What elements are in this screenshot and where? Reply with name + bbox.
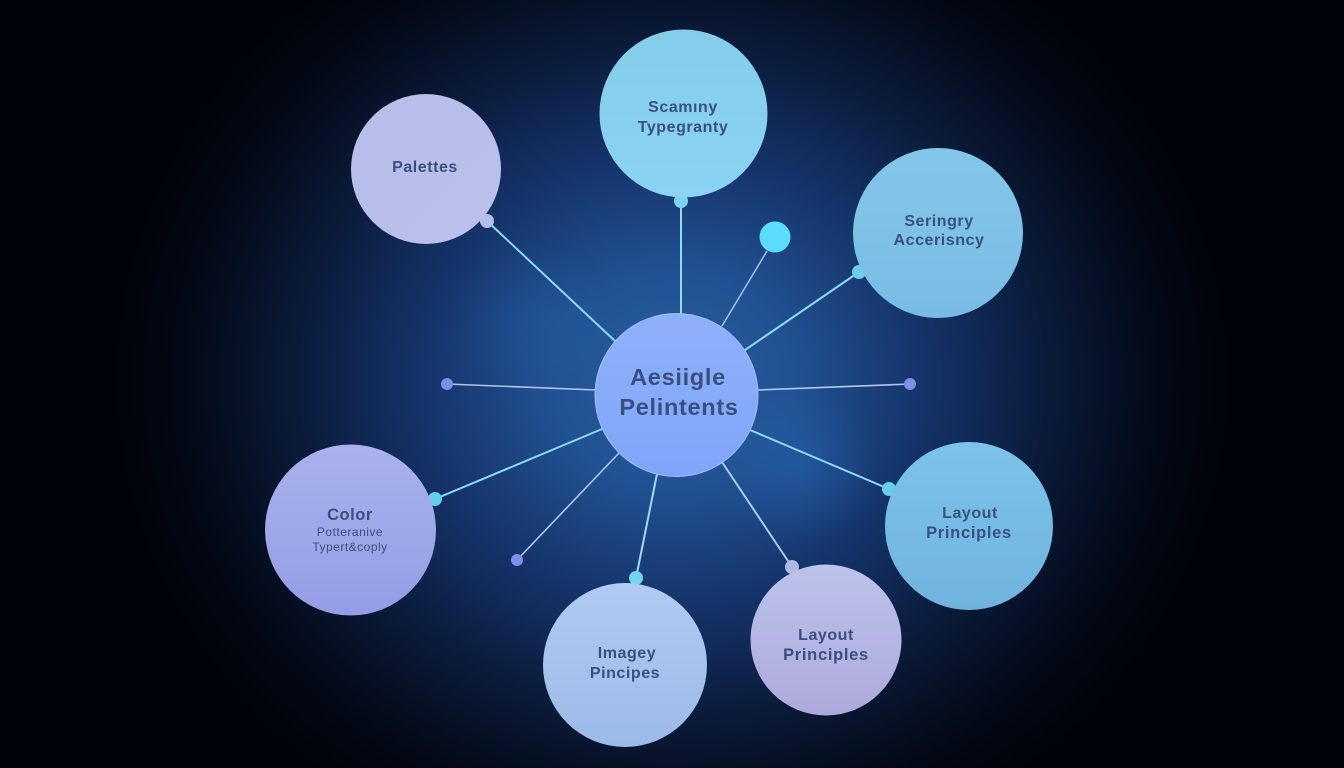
node: layout right: Principles xyxy=(926,524,1012,542)
central node: Aesiigle xyxy=(630,364,726,390)
connector: palettes xyxy=(480,214,615,341)
central node xyxy=(595,314,758,476)
node: color xyxy=(265,444,436,616)
connector: accuracy xyxy=(745,265,866,350)
connector: floating cyan node xyxy=(722,222,790,326)
node: layout lower: Layout xyxy=(798,627,854,644)
connector: typography xyxy=(674,194,688,314)
node: imagery xyxy=(543,583,707,747)
connector: imagery xyxy=(629,474,657,585)
node: color: Color xyxy=(327,506,373,524)
node: accuracy: Accerisncy xyxy=(894,232,984,249)
connector: left node xyxy=(441,378,596,390)
node: color: Potteranive xyxy=(317,525,383,539)
node: imagery: Imagey xyxy=(598,645,656,662)
node: layout lower xyxy=(750,564,902,716)
node: palettes xyxy=(351,94,501,244)
central node: Pelintents xyxy=(619,394,739,420)
node: imagery: Pincipes xyxy=(590,665,660,682)
node: palettes: Palettes xyxy=(392,159,458,176)
node: typography xyxy=(600,30,768,198)
node: layout lower: Principles xyxy=(783,646,869,664)
connector: lower left node xyxy=(511,453,619,566)
node: typography: Typegranty xyxy=(638,119,728,136)
connector: layout lower xyxy=(722,462,799,574)
connector: right node xyxy=(758,378,916,390)
node: typography: Scamıny xyxy=(648,99,718,116)
node: layout right xyxy=(885,442,1053,610)
node: accuracy: Seringry xyxy=(904,213,974,230)
node: color: Typert&coply xyxy=(312,540,388,554)
node: accuracy xyxy=(853,148,1023,318)
connector: color xyxy=(428,429,602,506)
node: layout right: Layout xyxy=(942,505,998,522)
connector: layout right xyxy=(750,430,896,496)
